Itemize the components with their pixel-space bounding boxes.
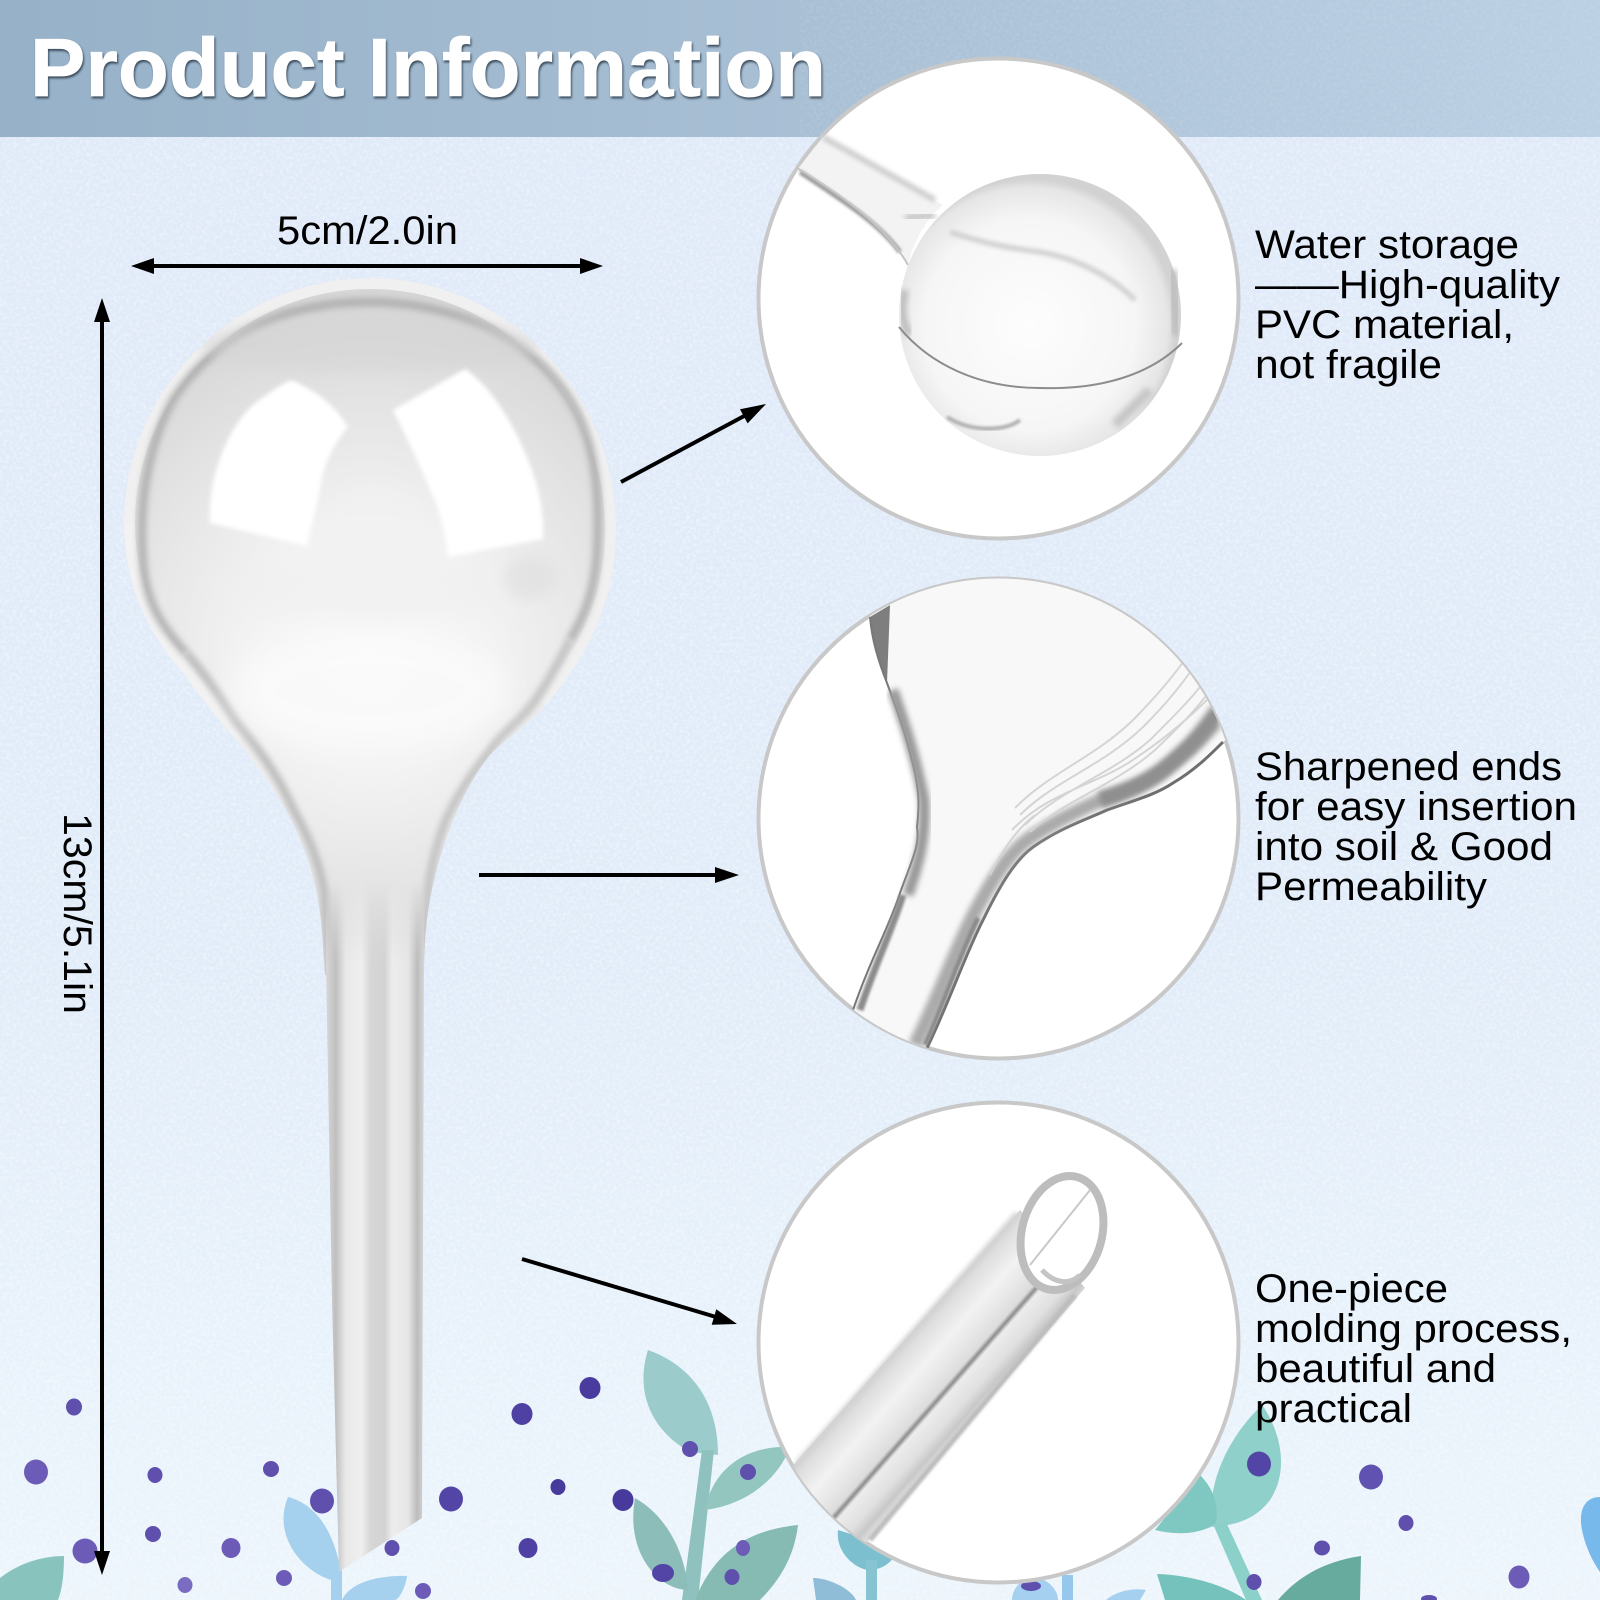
text block: water storage: ——High-quality <box>1255 263 1560 307</box>
detail: bulb neck <box>797 137 943 263</box>
plant: teal right of circle <box>1155 1405 1361 1600</box>
arrow: to water storage <box>621 404 766 482</box>
dimension: height <box>55 298 110 1575</box>
text block: water storage: Water storage <box>1255 223 1519 267</box>
detail: tube body <box>780 1210 1085 1550</box>
text block: one-piece molding <box>1255 1267 1572 1431</box>
panel: water storage detail circle <box>758 58 1238 538</box>
leaf: right edge blue <box>1581 1497 1600 1572</box>
panel: sharpened ends detail circle <box>758 560 1245 1070</box>
detail: seam <box>899 327 1182 388</box>
arrow: to sharpened ends <box>479 867 739 883</box>
header banner <box>0 0 1600 137</box>
plant: light blue under circle <box>1012 1575 1146 1600</box>
text block: one-piece molding: beautiful and <box>1255 1347 1496 1391</box>
text block: sharpened ends: into soil & Good <box>1255 825 1553 869</box>
label: height: 13cm/5.1in <box>55 813 99 1014</box>
bulb sphere <box>110 270 630 980</box>
detail: funnel body <box>854 578 1226 1048</box>
arrow: height <box>94 298 110 1575</box>
detail: bulb sphere <box>899 174 1181 456</box>
bulb stem <box>326 965 424 1572</box>
leaf: bottom left corner <box>0 1556 64 1600</box>
text block: one-piece molding: practical <box>1255 1387 1412 1431</box>
text block: water storage <box>1255 223 1560 387</box>
text block: one-piece molding: One-piece <box>1255 1267 1448 1311</box>
plant: blue near bulb tip <box>284 1497 407 1600</box>
text block: sharpened ends: for easy insertion <box>1255 785 1577 829</box>
arrow: width <box>131 258 603 274</box>
title: Product Information <box>30 21 826 114</box>
plant: teal centre <box>633 1350 798 1600</box>
bulb highlight left <box>210 380 348 546</box>
panel: one-piece molding detail circle <box>758 1102 1238 1582</box>
decorative plants <box>0 1350 1600 1600</box>
label: width: 5cm/2.0in <box>277 209 458 253</box>
text block: water storage: PVC material, <box>1255 303 1514 347</box>
text block: one-piece molding: molding process, <box>1255 1307 1572 1351</box>
text block: sharpened ends <box>1255 745 1577 909</box>
text block: sharpened ends: Permeability <box>1255 865 1487 909</box>
purple dots <box>24 1377 1530 1600</box>
text block: sharpened ends: Sharpened ends <box>1255 745 1562 789</box>
bulb neck blend <box>326 899 424 965</box>
text block: water storage: not fragile <box>1255 343 1442 387</box>
arrow: to one-piece molding <box>522 1259 737 1325</box>
bulb highlight right <box>393 369 543 557</box>
detail: surface ridges <box>990 655 1212 875</box>
detail: tube opening ring <box>1008 1167 1116 1299</box>
plant: blue-teal under circle <box>813 1530 896 1600</box>
dimension: width <box>131 209 603 274</box>
product: watering bulb full view <box>110 270 630 1572</box>
